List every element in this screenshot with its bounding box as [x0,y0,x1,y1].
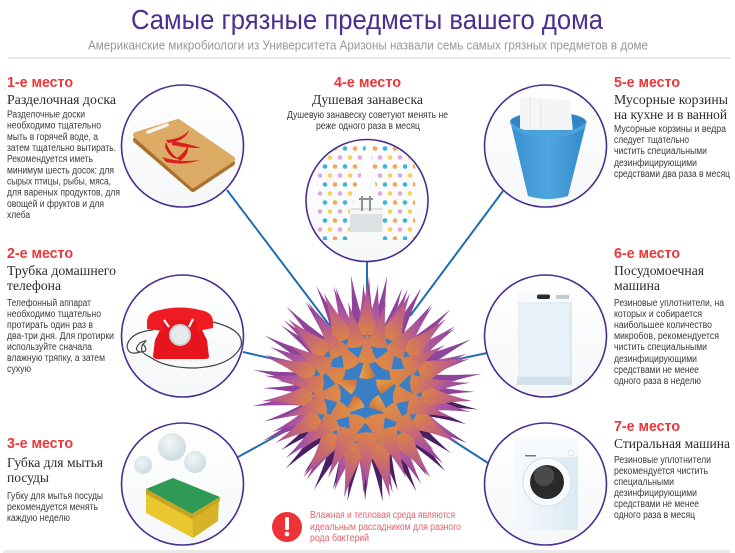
icon: shower curtain in circle [306,140,428,262]
item title: shower curtain: Душевая занавеска [312,93,424,108]
description: shower curtain: реже одного раза в месяц [316,121,420,132]
description: phone handset: Телефонный аппарат [7,297,91,309]
heading: place 1: 1-е место [7,75,73,91]
description: dishwasher: которых и собирается [614,308,702,320]
item title: trash bins [614,93,729,123]
description: phone handset [7,297,114,375]
description: washing machine: специальными [614,477,674,488]
description: cutting board [7,110,120,221]
connector lines [227,190,503,463]
panel: place 4 text [287,75,448,132]
panel: place 3 text [7,436,104,524]
description: cutting board: мыть в горячей воде, а [7,132,98,143]
description: phone handset: сухую [7,364,31,375]
description: washing machine: одного раза в месяц [614,510,695,521]
item title: sponge [7,456,104,486]
subtitle: Американские микробиологи из Университета Аризоны назвали семь самых грязных предметов в доме [88,38,648,52]
callout: warning [272,510,461,544]
description: washing machine: средствами не менее [614,499,699,510]
description: washing machine: дезинфицирующими [614,487,697,499]
description: cutting board: для вареных продуктов, для [7,188,120,199]
description: sponge [7,490,103,524]
description: shower curtain: Душевую занавеску советуют менять не [287,110,448,121]
description: washing machine: Резиновые уплотнители [614,455,711,466]
description: washing machine: рекомендуется чистить [614,466,708,477]
heading: place 7: 7-е место [614,419,680,435]
description: dishwasher: микробов, рекомендуется [614,330,719,342]
description: phone handset: два-три дня. Для протирки [7,331,114,342]
item title: washing machine: Стиральная машина [614,437,731,452]
item title: sponge: посуды [7,471,50,486]
virus illustration [251,274,483,503]
item title: cutting board: Разделочная доска [7,93,117,108]
description: cutting board: хлеба [7,209,30,221]
warning text: рода бактерий [310,532,369,544]
description: phone handset: необходимо тщательно [7,308,101,320]
icon: sponge and bubbles in circle [122,423,244,545]
description: dishwasher: одного раза в неделю [614,376,701,387]
heading: place 4: 4-е место [334,75,401,91]
title: Самые грязные предметы вашего дома [131,4,603,35]
item title: trash bins: Мусорные корзины [614,93,729,108]
item title: dishwasher: машина [614,279,661,294]
description: sponge: рекомендуется менять [7,502,98,513]
item title: dishwasher [614,264,705,294]
description: trash bins: дезинфицирующими [614,157,697,169]
description: cutting board: необходимо тщательно [7,120,101,132]
description: sponge: Губку для мытья посуды [7,490,103,502]
description: dishwasher: чистить специальными [614,342,707,353]
description: phone handset: используйте сначала [7,342,92,353]
warning text [310,510,461,544]
heading: place 5: 5-е место [614,75,680,91]
heading: place 6: 6-е место [614,246,680,262]
item title: phone handset [7,264,116,294]
icon: blue trash bin in circle [484,85,606,207]
description: cutting board: сырых птицы, рыбы, мяса, [7,176,111,188]
panel: place 2 text [7,246,116,375]
description: cutting board: Разделочные доски [7,110,85,120]
description: cutting board: Рекомендуется иметь [7,154,93,165]
description: dishwasher: средствами не менее [614,365,699,376]
item title: phone handset: Трубка домашнего [7,264,116,279]
panel: place 6 text [614,246,724,387]
icon: dishwasher in circle [484,275,606,397]
description: dishwasher [614,298,724,387]
panel: place 1 text [7,75,120,221]
description: dishwasher: дезинфицирующими [614,353,697,365]
description: dishwasher: наибольшее количество [614,319,712,331]
panel: place 5 text [614,75,730,180]
description: washing machine [614,455,711,521]
item title: dishwasher: Посудомоечная [614,264,705,279]
description: cutting board: минимум шесть досок: для [7,165,114,176]
description: cutting board: затем тщательно вытирать. [7,143,116,154]
item title: phone handset: телефона [7,279,62,294]
icon: red telephone in circle [122,275,244,397]
warning text: Влажная и тепловая среда являются [310,510,455,521]
item title: trash bins: на кухне и в ванной [614,108,727,123]
icon: cutting board in circle [122,85,244,207]
icon: washing machine in circle [484,423,606,545]
icon: exclamation mark [272,512,302,542]
description: phone handset: влажную тряпку, а затем [7,353,105,364]
description: sponge: каждую неделю [7,513,70,524]
description: trash bins [614,124,730,180]
description: cutting board: овощей и фруктов и для [7,198,104,210]
warning text: идеальным рассадником для разного [310,522,461,533]
description: trash bins: следует тщательно [614,135,689,146]
heading: place 3: 3-е место [7,436,73,452]
heading: place 2: 2-е место [7,246,73,262]
item title: sponge: Губка для мытья [7,456,104,471]
panel: place 7 text [614,419,731,521]
description: shower curtain [287,110,448,132]
description: phone handset: протирать один раз в [7,320,93,331]
description: trash bins: чистить специальными [614,146,707,157]
